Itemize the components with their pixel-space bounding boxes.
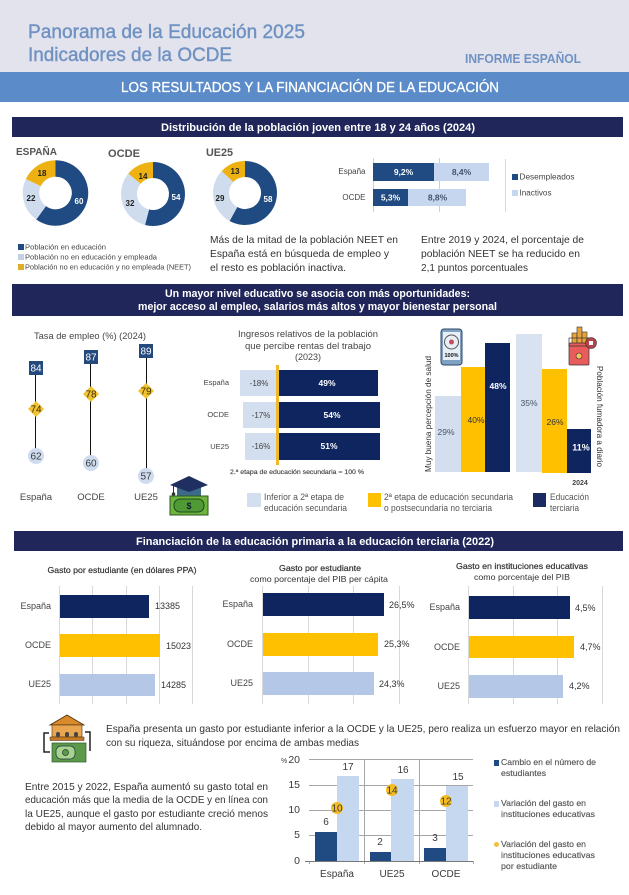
stacked bar legend: Desempleados xyxy=(520,172,574,182)
bar chart: spending per student: Gasto por estudiante (en dólares PPA) xyxy=(48,565,197,575)
shared legend: education level: Educación xyxy=(550,492,589,502)
header xyxy=(0,0,629,72)
bar chart: change in students and spending: 14 xyxy=(386,786,398,796)
lollipop chart: employment rate: 62 xyxy=(30,452,42,462)
donut: OCDE: 32 xyxy=(126,199,135,208)
bar chart: change in students and spending: 15 xyxy=(452,772,464,783)
donut: UE25: 29 xyxy=(216,194,225,203)
bar chart: change in students and spending: UE25 xyxy=(379,869,405,880)
bar chart: relative earnings xyxy=(204,329,380,476)
bar chart: relative earnings: que percibe rentas del trabajo xyxy=(245,341,371,351)
lollipop chart: employment rate xyxy=(20,331,158,503)
donut: UE25: 58 xyxy=(264,195,273,204)
bar chart: spending as share of GDP per capita: España xyxy=(222,599,253,609)
text: NEET reduction: población NEET se ha reducido en xyxy=(421,248,580,260)
donut: España: 22 xyxy=(27,194,36,203)
text: NEET share xyxy=(210,234,398,274)
title: Indicadores de la OCDE xyxy=(28,45,232,66)
bar chart: spending as share of GDP per capita: Gasto por estudiante xyxy=(279,563,361,573)
bar chart: change in students and spending: 15 xyxy=(288,779,300,791)
main banner: LOS RESULTADOS Y LA FINANCIACIÓN DE LA EDUCACIÓN xyxy=(121,79,499,96)
lollipop chart: employment rate: 78 xyxy=(85,390,97,400)
stacked bar chart: NEET xyxy=(338,158,506,212)
bar chart: change in students and spending: 20 xyxy=(288,754,300,766)
stacked bar chart: NEET: 5,3% xyxy=(381,192,401,202)
bottom chart legend: Cambio en el número de xyxy=(501,757,596,767)
stacked bar chart: NEET: 8,8% xyxy=(428,192,448,202)
section heading: opportunities: mejor acceso al empleo, salarios más altos y mayor bienestar personal xyxy=(138,301,497,313)
bar chart: change in students and spending: 12 xyxy=(440,796,452,808)
bar chart: daily smokers xyxy=(516,334,605,487)
icon: cigarette pack xyxy=(569,327,596,365)
bottom chart legend: Variación del gasto en xyxy=(501,798,586,808)
main banner xyxy=(0,72,629,102)
bottom chart legend: instituciones educativas xyxy=(501,850,595,860)
donut: UE25: 13 xyxy=(231,167,240,176)
bar chart: spending in institutions: 4,7% xyxy=(580,642,601,652)
shared legend: education level: terciaria xyxy=(550,503,579,513)
bar chart: change in students and spending: 3 xyxy=(432,833,438,844)
bar chart: change in students and spending: 0 xyxy=(294,855,300,867)
bar chart: change in students and spending: OCDE xyxy=(432,869,461,880)
lollipop chart: employment rate: 60 xyxy=(85,458,97,470)
bar chart: spending in institutions: OCDE xyxy=(434,642,460,652)
bar chart: change in students and spending: España xyxy=(320,869,354,880)
bar chart: daily smokers: 26% xyxy=(546,417,564,427)
shared legend: education level: 2ª etapa de educación secundaria xyxy=(384,492,513,502)
bar chart: change in students and spending: 5 xyxy=(294,829,300,841)
title: Panorama de la Educación 2025 xyxy=(28,22,305,43)
bar chart: change in students and spending: 10 xyxy=(288,804,300,816)
bottom chart legend: Variación del gasto en xyxy=(501,839,586,849)
bar chart: relative earnings: -16% xyxy=(252,442,270,451)
bar chart: health perception: 48% xyxy=(489,381,507,391)
title xyxy=(28,22,305,66)
donut: España xyxy=(16,145,84,218)
stacked bar chart: NEET: España xyxy=(338,167,366,176)
bar chart: relative earnings: -17% xyxy=(252,411,270,420)
lollipop chart: employment rate: 74 xyxy=(30,404,42,416)
text: change 2015-2022: Entre 2015 y 2022, España aumentó su gasto total en xyxy=(25,781,268,793)
bottom chart legend xyxy=(494,757,596,871)
stacked bar legend: Inactivos xyxy=(520,188,552,198)
text: spending summary xyxy=(106,723,620,749)
icon: phone with heart xyxy=(441,329,462,365)
bar chart: health perception xyxy=(423,343,510,472)
stacked bar chart: NEET: 9,2% xyxy=(394,167,414,177)
icon: phone with heart: 100% xyxy=(444,353,459,359)
donut legend: Población no en educación y empleada xyxy=(25,254,157,262)
bar chart: relative earnings: España xyxy=(204,378,230,387)
donut: UE25 xyxy=(206,147,273,217)
section heading: distribution xyxy=(12,117,623,137)
text: NEET share: España está en búsqueda de empleo y xyxy=(210,248,390,260)
section heading: financing: Financiación de la educación primaria a la educación terciaria (2022) xyxy=(136,536,494,548)
bar chart: relative earnings: -18% xyxy=(250,379,268,388)
lollipop chart: employment rate: UE25 xyxy=(134,492,158,503)
bar chart: change in students and spending: 17 xyxy=(342,762,354,773)
donut: OCDE: OCDE xyxy=(108,148,140,160)
informe label: INFORME ESPAÑOL xyxy=(465,51,581,66)
bar chart: daily smokers: 2024 xyxy=(572,480,588,487)
donut: OCDE xyxy=(108,148,181,218)
text: NEET reduction: Entre 2019 y 2024, el porcentaje de xyxy=(421,234,584,246)
text: change 2015-2022: la UE25, aunque el gasto por estudiante creció menos xyxy=(25,808,268,820)
bar chart: spending in institutions: UE25 xyxy=(437,681,460,691)
bar chart: spending as share of GDP per capita: UE25 xyxy=(230,678,253,688)
donut legend: Población no en educación y no empleada (NEET) xyxy=(25,264,191,272)
bottom chart legend: estudiantes xyxy=(501,768,546,778)
bar chart: relative earnings: 2.ª etapa de educación secundaria = 100 % xyxy=(230,469,364,476)
bar chart: spending per student: 14285 xyxy=(161,680,186,690)
lollipop chart: employment rate: OCDE xyxy=(77,492,105,503)
bar chart: daily smokers: 35% xyxy=(520,398,538,408)
bar chart: change in students and spending: 2 xyxy=(377,837,383,848)
section heading: opportunities xyxy=(12,284,623,316)
lollipop chart: employment rate: 57 xyxy=(140,472,152,482)
bar chart: health perception: 40% xyxy=(467,415,485,425)
bar chart: spending in institutions: 4,5% xyxy=(575,603,596,613)
donut legend: Población en educación xyxy=(25,244,106,252)
lollipop chart: employment rate: España xyxy=(20,492,53,503)
bar chart: change in students and spending: 10 xyxy=(331,804,343,814)
lollipop chart: employment rate: 79 xyxy=(140,386,152,398)
lollipop chart: employment rate: 84 xyxy=(30,364,42,374)
bar chart: relative earnings: Ingresos relativos de la población xyxy=(238,329,378,339)
shared legend: education level xyxy=(247,492,589,513)
text: NEET reduction xyxy=(421,234,584,274)
bar chart: spending in institutions: Gasto en instituciones educativas xyxy=(456,561,588,571)
bar chart: daily smokers: 11% xyxy=(572,442,590,452)
bar chart: spending per student: UE25 xyxy=(28,679,51,689)
bar chart: relative earnings: OCDE xyxy=(207,410,229,419)
text: NEET share: el resto es población inactiva. xyxy=(210,262,346,274)
stacked bar legend xyxy=(512,172,574,198)
section heading: distribution: Distribución de la población joven entre 18 y 24 años (2024) xyxy=(161,122,475,134)
bar chart: health perception: 29% xyxy=(437,427,455,437)
bar chart: spending as share of GDP per capita: 24,3% xyxy=(379,679,405,689)
bar chart: spending in institutions: como porcentaje del PIB xyxy=(474,572,570,582)
text: change 2015-2022 xyxy=(25,781,268,833)
text: spending summary: España presenta un gasto por estudiante inferior a la OCDE y la UE25, pero realiza un esfuerzo mayor en relación xyxy=(106,723,620,735)
donut: UE25: UE25 xyxy=(206,147,233,159)
bar chart: change in students and spending: % xyxy=(281,758,287,765)
icon: graduation cap and banknote: $ xyxy=(186,501,192,511)
bar chart: spending in institutions: España xyxy=(429,602,460,612)
bar chart: change in students and spending: 6 xyxy=(323,817,329,828)
icon: bank and money xyxy=(44,715,90,762)
text: change 2015-2022: debido al mayor aumento del alumnado. xyxy=(25,821,202,833)
bar chart: spending per student xyxy=(20,565,197,704)
bar chart: relative earnings: 51% xyxy=(320,441,338,451)
lollipop chart: employment rate: 87 xyxy=(85,352,97,364)
lollipop chart: employment rate: 89 xyxy=(140,346,152,358)
stacked bar chart: NEET: OCDE xyxy=(342,193,366,202)
shared legend: education level: o postsecundaria no terciaria xyxy=(384,503,492,513)
donut legend xyxy=(18,244,191,272)
shared legend: education level: educación secundaria xyxy=(264,503,347,513)
donut: España: 60 xyxy=(75,197,84,206)
shared legend: education level: Inferior a 2ª etapa de xyxy=(264,492,344,502)
section heading: opportunities: Un mayor nivel educativo se asocia con más oportunidades: xyxy=(165,288,470,300)
bottom chart legend: instituciones educativas xyxy=(501,809,595,819)
bar chart: spending as share of GDP per capita xyxy=(222,563,415,704)
bar chart: spending per student: OCDE xyxy=(25,640,51,650)
bar chart: spending per student: 15023 xyxy=(166,641,191,651)
bar chart: change in students and spending: 16 xyxy=(397,765,409,776)
bottom chart legend: por estudiante xyxy=(501,861,557,871)
donut: OCDE: 54 xyxy=(172,193,181,202)
bar chart: spending as share of GDP per capita: como porcentaje del PIB per cápita xyxy=(250,574,388,584)
bar chart: health perception: Muy buena percepción de salud xyxy=(423,356,433,472)
bar chart: daily smokers: Población fumadora a diario xyxy=(595,366,605,467)
donut: España: 18 xyxy=(38,169,47,178)
bar chart: spending per student: 13385 xyxy=(155,601,180,611)
bar chart: spending in institutions xyxy=(429,561,602,704)
bar chart: spending as share of GDP per capita: 26,5% xyxy=(389,600,415,610)
bar chart: relative earnings: UE25 xyxy=(210,442,229,451)
section heading: financing xyxy=(14,531,623,551)
icon: graduation cap and banknote xyxy=(170,476,208,515)
bar chart: relative earnings: 49% xyxy=(318,378,336,388)
donut: OCDE: 14 xyxy=(139,172,148,181)
text: change 2015-2022: educación más que la media de la OCDE y en línea con xyxy=(25,794,268,806)
bar chart: spending as share of GDP per capita: 25,3% xyxy=(384,639,410,649)
donut: España: ESPAÑA xyxy=(16,145,57,158)
bar chart: spending per student: España xyxy=(20,601,51,611)
text: NEET share: Más de la mitad de la población NEET en xyxy=(210,234,398,246)
bar chart: spending as share of GDP per capita: OCDE xyxy=(227,639,253,649)
text: spending summary: con su riqueza, situándose por encima de ambas medias xyxy=(106,737,359,749)
text: NEET reduction: 2,1 puntos porcentuales xyxy=(421,262,528,274)
stacked bar chart: NEET: 8,4% xyxy=(452,167,472,177)
bar chart: change in students and spending xyxy=(281,754,474,880)
lollipop chart: employment rate: Tasa de empleo (%) (2024) xyxy=(34,331,146,341)
bar chart: relative earnings: 54% xyxy=(323,410,341,420)
bar chart: relative earnings: (2023) xyxy=(295,352,321,362)
bar chart: spending in institutions: 4,2% xyxy=(569,681,590,691)
